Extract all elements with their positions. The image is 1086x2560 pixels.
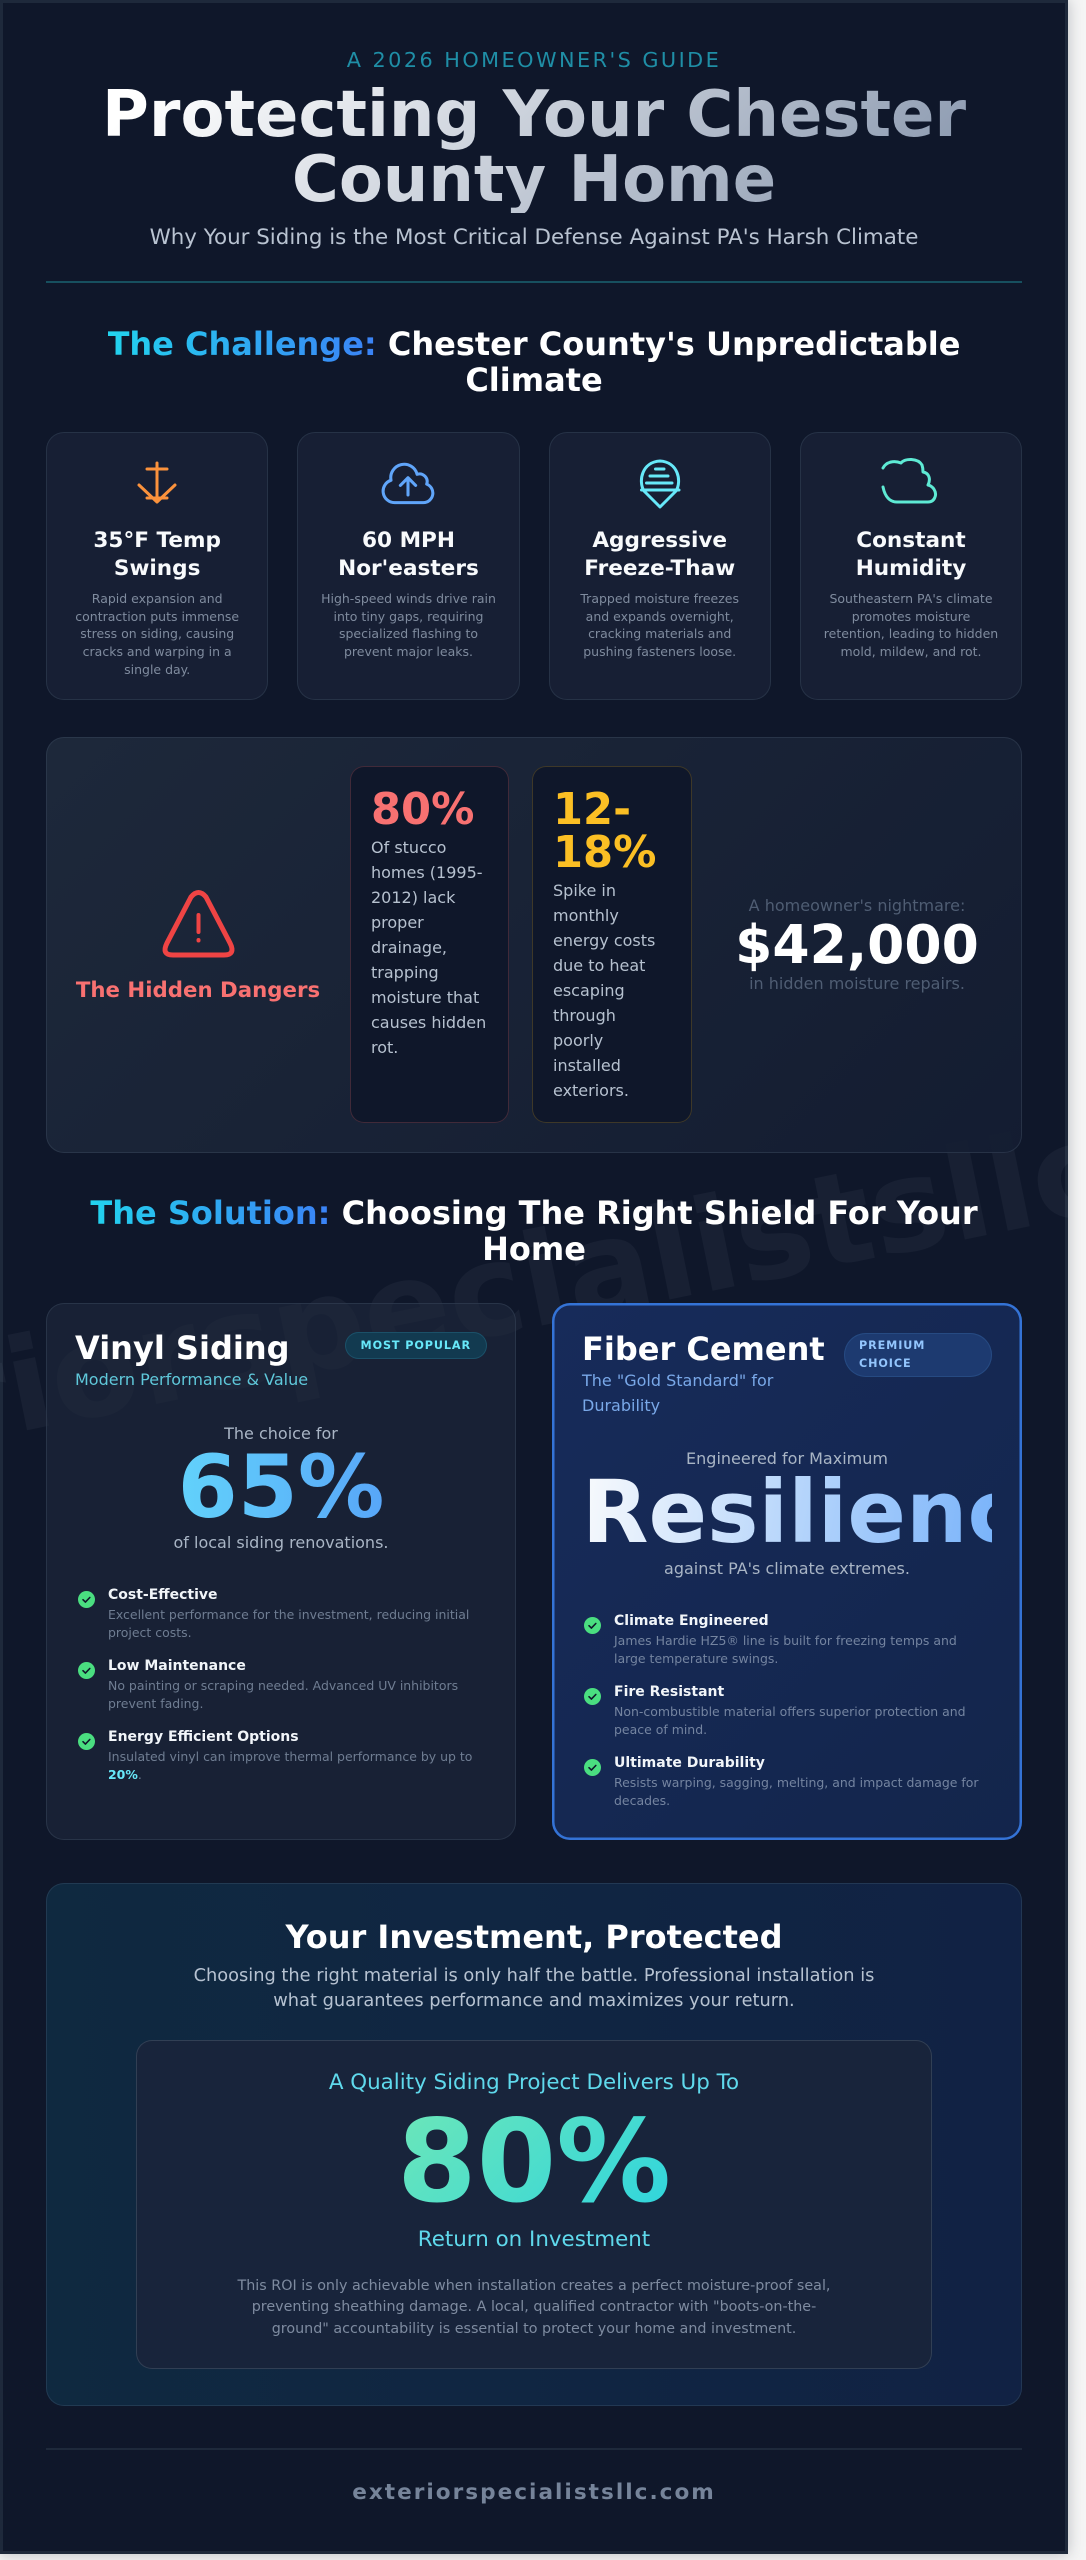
feature text: James Hardie HZ5® line is built for freezing temps and: [614, 1633, 957, 1648]
card heading: [93, 528, 221, 581]
panel: temp swings: [46, 432, 268, 700]
card text: promotes moisture: [852, 609, 970, 624]
stat: resilience: [582, 1449, 992, 1578]
stat figure: 65%: [178, 1438, 384, 1538]
panel: vinyl siding: [46, 1303, 516, 1840]
card text: Trapped moisture freezes: [580, 591, 739, 606]
header divider: [46, 281, 1022, 283]
card heading: 35°F Temp: [93, 528, 221, 552]
stat: 65 percent: [174, 1424, 388, 1552]
stat lead: Engineered for Maximum: [686, 1449, 888, 1468]
icon: humid cloud: [881, 458, 938, 504]
feature title: Ultimate Durability: [614, 1755, 765, 1771]
stat text: exteriors.: [553, 1080, 629, 1100]
card heading: Swings: [114, 556, 200, 581]
fiber title: Fiber Cement: [582, 1330, 825, 1368]
stat text: Of stucco: [371, 838, 446, 856]
feature: fire resistant: [584, 1684, 966, 1737]
footer url: exteriorspecialistsllc.com: [352, 2480, 716, 2505]
stat text: causes hidden: [371, 1012, 486, 1032]
fiber subtitle: The "Gold Standard" for: [582, 1370, 773, 1390]
stat tail: against PA's climate extremes.: [664, 1559, 910, 1578]
vinyl subtitle: Modern Performance & Value: [75, 1370, 308, 1389]
icon: temperature anchor: [137, 462, 177, 504]
stat text: energy costs: [553, 930, 655, 950]
card heading: Nor'easters: [338, 556, 479, 581]
card text: [824, 591, 998, 659]
panel: hidden dangers: [46, 737, 1022, 1153]
ROI note: preventing sheathing damage. A local, qualified contractor with "boots-on-the-: [252, 2299, 816, 2315]
stat: stucco: [350, 766, 509, 1123]
card heading: Aggressive: [592, 528, 727, 552]
feature text: [108, 1749, 472, 1782]
stat number: [553, 785, 656, 878]
badge: most popular: [345, 1332, 486, 1359]
panel: nor'easters: [297, 432, 520, 700]
card heading: [338, 528, 479, 581]
icon: check: [584, 1617, 601, 1634]
header: [46, 48, 1022, 283]
panel: humidity: [800, 432, 1022, 700]
feature text: [108, 1607, 469, 1640]
feature text: project costs.: [108, 1625, 192, 1640]
ROI lead: A Quality Siding Project Delivers Up To: [329, 2070, 739, 2095]
feature: cost-effective: [78, 1587, 469, 1640]
card text: [580, 591, 739, 659]
panel: investment: [46, 1883, 1022, 2406]
feature text: Excellent performance for the investment, reducing initial: [108, 1607, 469, 1622]
icon: freeze drop: [640, 460, 680, 509]
card text: Southeastern PA's climate: [829, 591, 993, 606]
investment heading: Your Investment, Protected: [285, 1918, 783, 1956]
hidden dangers heading: The Hidden Dangers: [76, 978, 320, 1003]
feature title: Low Maintenance: [108, 1658, 246, 1674]
feature: climate engineered: [584, 1613, 957, 1666]
card text: into tiny gaps, requiring: [334, 609, 483, 624]
card heading: [584, 528, 735, 581]
ROI note: ground" accountability is essential to protect your home and investment.: [272, 2320, 796, 2336]
title: County Home: [292, 142, 776, 216]
card text: and expands overnight,: [586, 609, 734, 624]
subtitle: Why Your Siding is the Most Critical Defense Against PA's Harsh Climate: [150, 225, 918, 250]
card text: Rapid expansion and: [92, 591, 223, 606]
stat tail: of local siding renovations.: [174, 1533, 388, 1552]
stat text: poorly: [553, 1030, 603, 1050]
stat text: rot.: [371, 1038, 398, 1056]
card text: prevent major leaks.: [344, 644, 473, 659]
callout figure: $42,000: [735, 913, 979, 976]
ROI figure: 80%: [397, 2096, 671, 2229]
feature text: 20%.: [108, 1767, 142, 1782]
stat text: installed: [553, 1056, 621, 1074]
feature title: Cost-Effective: [108, 1587, 218, 1603]
icon: check: [78, 1662, 95, 1679]
card heading: Freeze-Thaw: [584, 556, 735, 581]
stat number: 12-: [553, 785, 631, 835]
vinyl title: Vinyl Siding: [75, 1329, 290, 1367]
investment intro: [46, 1962, 1022, 2012]
fiber subtitle: Durability: [582, 1396, 660, 1414]
card text: retention, leading to hidden: [824, 626, 998, 641]
stat text: monthly: [553, 906, 619, 924]
stat text: homes (1995-: [371, 862, 483, 882]
feature text: Resists warping, sagging, melting, and impact damage for: [614, 1775, 979, 1790]
card text: [75, 591, 239, 677]
heading: the solution: Home: [482, 1230, 586, 1268]
card heading: [856, 528, 966, 581]
feature text: decades.: [614, 1793, 670, 1808]
panel: ROI: [136, 2040, 932, 2369]
stat text: [553, 880, 655, 1100]
card text: pushing fasteners loose.: [583, 644, 736, 659]
stat text: Spike in: [553, 880, 616, 900]
fiber subtitle: [582, 1370, 774, 1414]
card text: stress on siding, causing: [80, 626, 234, 641]
icon: check: [584, 1688, 601, 1705]
feature text: large temperature swings.: [614, 1651, 778, 1666]
feature title: Energy Efficient Options: [108, 1729, 299, 1745]
icon: cloud with arrow: [382, 462, 434, 504]
callout: repair cost: [735, 896, 979, 993]
ROI note: This ROI is only achievable when installation creates a perfect moisture-proof seal,: [238, 2278, 830, 2294]
stat lead: The choice for: [224, 1424, 338, 1443]
badge: premium choice: PREMIUM: [859, 1339, 925, 1352]
card heading: 60 MPH: [362, 528, 455, 552]
card heading: Constant: [856, 528, 966, 552]
stat text: [371, 838, 486, 1056]
card text: cracking materials and: [588, 626, 731, 641]
callout tail: in hidden moisture repairs.: [749, 974, 965, 993]
icon: check: [78, 1733, 95, 1750]
icon: check: [78, 1591, 95, 1608]
title: [46, 82, 1022, 212]
icon: check: [584, 1759, 601, 1776]
feature title: Climate Engineered: [614, 1613, 769, 1629]
callout lead: A homeowner's nightmare:: [749, 896, 965, 915]
panel: fiber cement: [552, 1303, 1022, 1840]
ROI label: Return on Investment: [418, 2227, 650, 2252]
stat text: moisture that: [371, 988, 479, 1006]
card text: single day.: [124, 662, 190, 677]
feature: energy efficient: [78, 1729, 472, 1782]
badge: premium choice: CHOICE: [859, 1357, 912, 1370]
title: Protecting Your Chester: [102, 78, 966, 152]
card text: contraction puts immense: [75, 609, 239, 624]
card text: [321, 591, 496, 659]
card text: cracks and warping in a: [83, 644, 232, 659]
stat text: due to heat: [553, 956, 645, 974]
icon: warning triangle: [162, 890, 234, 958]
feature text: [613, 1633, 957, 1666]
panel: freeze-thaw: [548, 432, 771, 700]
stat number: 18%: [553, 828, 656, 878]
footer: [46, 2448, 1022, 2520]
feature text: prevent fading.: [108, 1696, 203, 1711]
heading: the solution: The Solution: Choosing The Right Shield For Your: [90, 1194, 978, 1232]
feature text: peace of mind.: [614, 1722, 707, 1737]
feature text: Non-combustible material offers superior protection and: [614, 1704, 966, 1719]
badge: most popular: MOST POPULAR: [361, 1339, 471, 1352]
stat: energy: [532, 766, 692, 1123]
stat text: through: [553, 1006, 616, 1024]
feature text: No painting or scraping needed. Advanced UV inhibitors: [108, 1678, 458, 1693]
feature text: [108, 1678, 458, 1711]
card heading: Humidity: [856, 556, 966, 581]
feature text: [614, 1704, 966, 1737]
stat text: 2012) lack: [371, 888, 455, 906]
card text: High-speed winds drive rain: [321, 591, 496, 606]
ROI note: [136, 2276, 932, 2340]
badge: premium choice: [844, 1333, 992, 1377]
investment intro: Choosing the right material is only half the battle. Professional installation is: [194, 1964, 874, 1986]
eyebrow: A 2026 HOMEOWNER'S GUIDE: [347, 48, 721, 72]
feature: low maintenance: [78, 1658, 458, 1711]
heading: the solution: [90, 1194, 978, 1268]
feature title: Fire Resistant: [614, 1684, 724, 1700]
stat number: 80%: [371, 785, 474, 835]
investment intro: what guarantees performance and maximizes your return.: [273, 1990, 795, 2010]
stat text: escaping: [553, 980, 625, 1000]
stat text: trapping: [371, 962, 439, 982]
feature text: Insulated vinyl can improve thermal performance by up to: [108, 1749, 472, 1764]
feature: ultimate durability: [584, 1754, 994, 1816]
feature text: [614, 1774, 979, 1810]
card text: mold, mildew, and rot.: [840, 644, 981, 659]
heading: the challenge: The Challenge: Chester County's Unpredictable: [108, 325, 960, 363]
heading: the challenge: [108, 325, 960, 398]
stat text: proper: [371, 912, 424, 932]
heading: the challenge: Climate: [465, 360, 603, 398]
card text: specialized flashing to: [339, 626, 478, 641]
stat text: drainage,: [371, 938, 447, 956]
